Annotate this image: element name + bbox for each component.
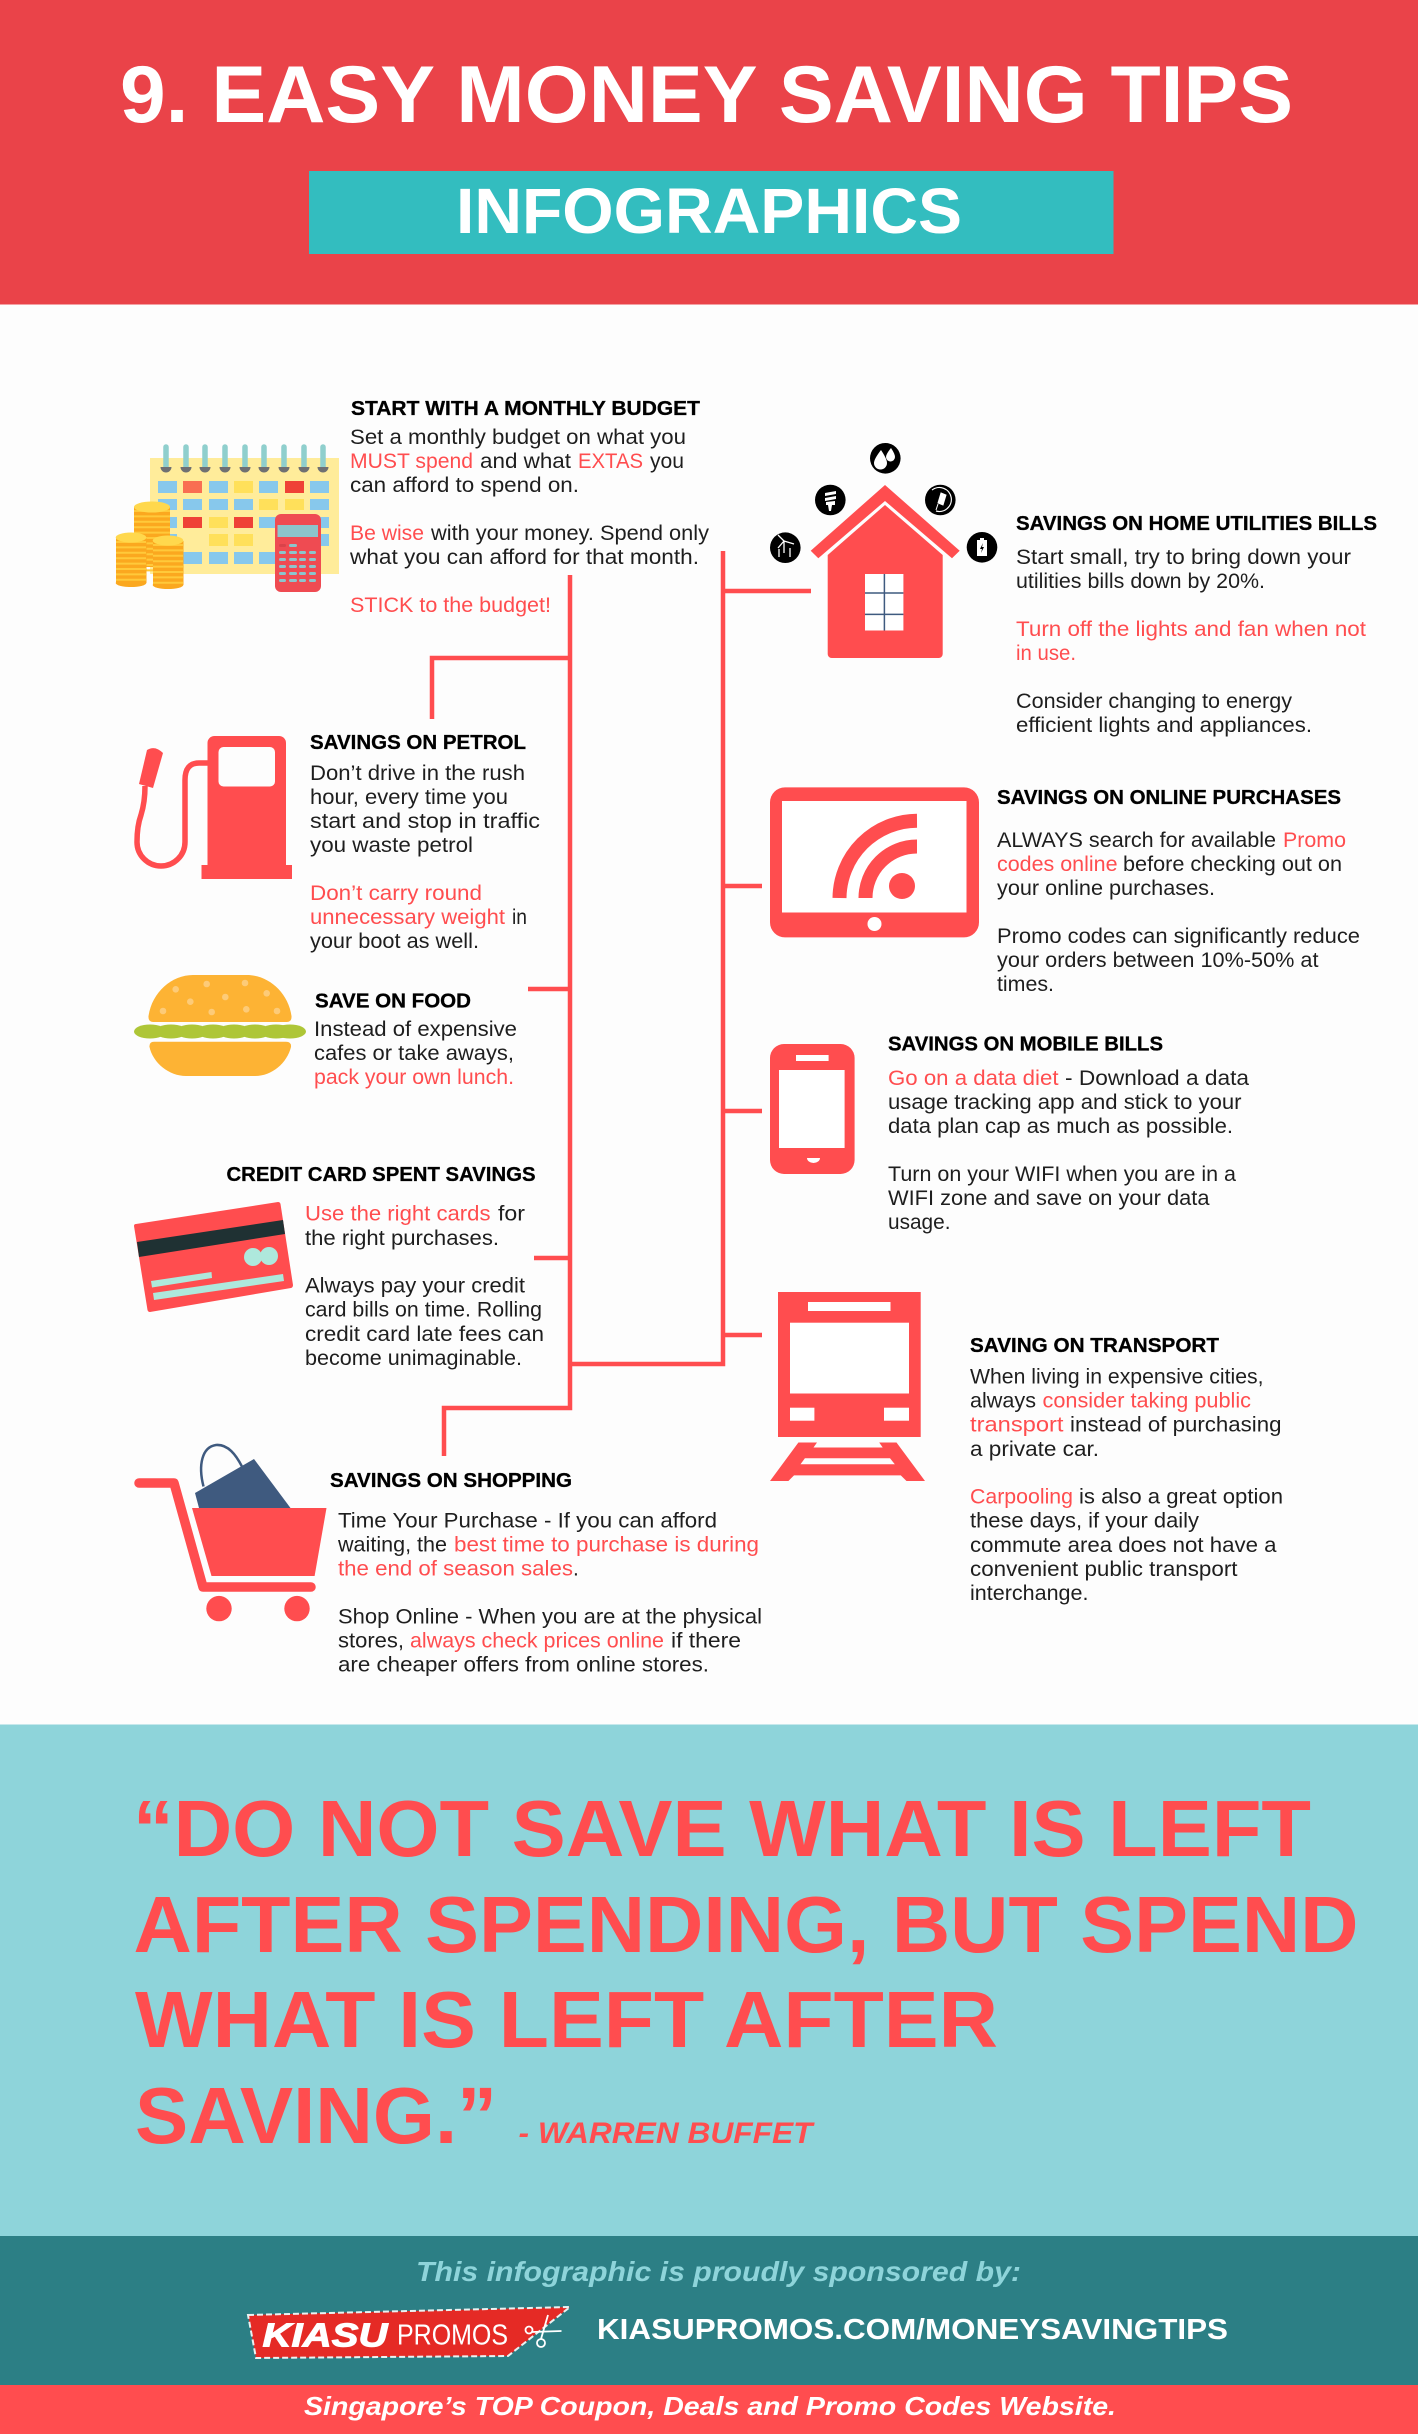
text: mobile bills body: Go on a data diet <box>888 1067 1059 1090</box>
text: home utilities body: efficient lights and appliances. <box>1016 714 1312 737</box>
tagline bar: Singapore’s TOP Coupon, Deals and Promo Codes Website. <box>304 2391 1116 2421</box>
text: petrol body: Don’t drive in the rush <box>310 762 525 785</box>
text: credit card body: for <box>498 1202 525 1226</box>
quote text: WHAT IS LEFT AFTER <box>135 1975 998 2064</box>
text: transport body: these days, if your daily <box>970 1510 1200 1532</box>
text: credit card body <box>305 1202 544 1370</box>
text: food body: cafes or take aways, <box>314 1042 514 1065</box>
text: transport body: When living in expensive cities, <box>970 1366 1264 1388</box>
text: petrol body: you waste petrol <box>310 834 473 857</box>
text: home utilities body: Turn off the lights and fan when not <box>1016 618 1366 641</box>
text: budget body: Be wise <box>350 522 424 545</box>
text: petrol body: hour, every time you <box>310 786 508 809</box>
title: 9. EASY MONEY SAVING TIPS <box>120 50 1293 140</box>
text: mobile bills body: usage. <box>888 1211 950 1234</box>
panel: mobile bills <box>770 1034 1249 1234</box>
icon: battery <box>967 532 997 563</box>
text: online purchases body: Promo codes can significantly reduce <box>997 925 1360 948</box>
text: food body: pack your own lunch. <box>314 1066 514 1089</box>
text: shopping body: if there <box>671 1630 741 1652</box>
text: credit card body: Always pay your credit <box>305 1274 525 1298</box>
quote text: “DO NOT SAVE WHAT IS LEFT <box>133 1784 1311 1873</box>
text: online purchases body: times. <box>997 973 1054 996</box>
quote text: AFTER SPENDING, BUT SPEND <box>134 1880 1358 1969</box>
text: petrol body <box>310 762 540 953</box>
text: transport body: is also a great option <box>1079 1486 1283 1508</box>
icon: light bulb <box>815 485 846 515</box>
text: budget body <box>349 426 710 617</box>
panel: food <box>134 975 517 1089</box>
text: budget body: MUST spend <box>350 450 473 473</box>
icon: left coin stack <box>116 532 146 587</box>
text: transport body: commute area does not have a <box>970 1534 1277 1557</box>
heading: food: SAVE ON FOOD <box>315 990 471 1012</box>
text: budget body: STICK to the budget! <box>350 594 551 617</box>
heading: transport: SAVING ON TRANSPORT <box>970 1335 1219 1357</box>
text: shopping body: the end of season sales . <box>338 1558 579 1580</box>
connector lines <box>432 551 811 1456</box>
quote text: SAVING.” <box>135 2071 497 2160</box>
text: online purchases body: before checking out on <box>1123 853 1342 876</box>
text: online purchases body: codes online <box>997 853 1118 876</box>
panel: online purchases <box>770 787 1360 996</box>
logo: Kiasu Promos: PROMOS <box>397 2320 508 2352</box>
text: online purchases body <box>997 829 1360 996</box>
panel: monthly budget <box>116 398 710 617</box>
text: petrol body: unnecessary weight <box>310 906 505 929</box>
text: shopping body: waiting, the <box>337 1534 447 1556</box>
heading: mobile bills: SAVINGS ON MOBILE BILLS <box>888 1034 1163 1056</box>
text: transport body <box>970 1366 1283 1605</box>
text: online purchases body: ALWAYS search for available <box>997 829 1276 852</box>
panel: shopping <box>139 1445 762 1676</box>
heading: petrol: SAVINGS ON PETROL <box>310 732 526 754</box>
text: transport body: transport <box>970 1414 1064 1436</box>
tagline bar <box>0 2385 1418 2434</box>
icon: house <box>811 485 960 658</box>
icon: scissors <box>526 2315 562 2347</box>
heading: home utilities: SAVINGS ON HOME UTILITIES BILLS <box>1016 513 1377 535</box>
text: shopping body: always check prices online <box>410 1630 664 1652</box>
text: petrol body: start and stop in traffic <box>310 810 540 833</box>
icon: petrol pump <box>137 736 292 879</box>
icon: right coin stack <box>153 536 184 589</box>
text: shopping body: best time to purchase is during <box>454 1534 759 1556</box>
text: budget body: with your money. Spend only <box>430 522 710 545</box>
panel: transport <box>770 1292 1283 1605</box>
icon: power plug <box>925 485 956 515</box>
text: mobile bills body: WIFI zone and save on your data <box>888 1187 1210 1210</box>
text: home utilities body: utilities bills down by 20%. <box>1016 570 1265 593</box>
text: home utilities body: Consider changing to energy <box>1016 690 1293 713</box>
icon: train <box>770 1292 925 1481</box>
text: online purchases body: your orders between 10%-50% at <box>997 949 1319 972</box>
text: mobile bills body: data plan cap as much as possible. <box>888 1115 1233 1138</box>
icon: mobile phone <box>770 1044 855 1174</box>
text: transport body: Carpooling <box>970 1486 1073 1508</box>
text: food body <box>314 1018 517 1089</box>
text: transport body: instead of purchasing <box>1070 1414 1282 1436</box>
text: mobile bills body: Turn on your WIFI when you are in a <box>888 1163 1236 1186</box>
panel: sponsor footer <box>0 2236 1418 2385</box>
text: transport body: interchange. <box>970 1582 1088 1605</box>
text: home utilities body <box>1016 546 1366 737</box>
text: credit card body: Use the right cards <box>305 1202 490 1226</box>
header banner <box>0 0 1418 304</box>
text: food body: Instead of expensive <box>314 1018 517 1041</box>
text: mobile bills body: - Download a data <box>1065 1067 1249 1090</box>
text: budget body: what you can afford for that month. <box>349 546 699 569</box>
icon: burger <box>134 975 306 1076</box>
text: home utilities body: Start small, try to bring down your <box>1016 546 1351 569</box>
icon: shopping cart with bag <box>139 1445 326 1621</box>
text: budget body: can afford to spend on. <box>350 474 579 497</box>
heading: shopping: SAVINGS ON SHOPPING <box>330 1470 572 1492</box>
text: credit card body: become unimaginable. <box>305 1347 522 1370</box>
text: mobile bills body <box>888 1067 1249 1234</box>
panel: quote <box>0 1724 1418 2236</box>
text: transport body: a private car. <box>970 1438 1099 1461</box>
panel: petrol <box>137 732 540 953</box>
text: transport body: consider taking public <box>1042 1390 1251 1412</box>
text: credit card body: card bills on time. Rolling <box>305 1298 542 1322</box>
panel: home utilities <box>770 443 1377 737</box>
text: budget body: you <box>650 450 684 473</box>
subtitle band <box>309 171 1114 254</box>
subtitle band: INFOGRAPHICS <box>456 175 962 247</box>
icon: credit card <box>134 1202 293 1312</box>
panel: credit card <box>134 1164 544 1370</box>
text: petrol body: your boot as well. <box>310 930 479 953</box>
sponsor URL: KIASUPROMOS.COM/MONEYSAVINGTIPS <box>597 2314 1228 2346</box>
quote attribution: - WARREN BUFFET <box>518 2117 815 2150</box>
icon: water drops <box>870 443 901 474</box>
text: petrol body: in <box>512 906 527 929</box>
text: home utilities body: in use. <box>1016 642 1076 665</box>
text: shopping body: Time Your Purchase - If you can afford <box>338 1510 717 1532</box>
logo: Kiasu Promos <box>248 2307 570 2358</box>
logo: Kiasu Promos: KIASU <box>262 2316 389 2354</box>
heading: credit card: CREDIT CARD SPENT SAVINGS <box>226 1164 536 1186</box>
icon: tablet with wifi <box>770 787 979 937</box>
text: mobile bills body: usage tracking app and stick to your <box>888 1091 1242 1114</box>
text: petrol body: Don’t carry round <box>310 882 482 905</box>
text: budget body: Set a monthly budget on what you <box>350 426 686 449</box>
text: online purchases body: Promo <box>1283 829 1346 852</box>
heading: online purchases: SAVINGS ON ONLINE PURCHASES <box>997 787 1341 809</box>
text: credit card body: the right purchases. <box>305 1227 499 1250</box>
text: shopping body <box>337 1510 762 1676</box>
icon: back coin stack <box>134 502 170 572</box>
sponsor line: This infographic is proudly sponsored by: <box>416 2256 1021 2287</box>
text: budget body: and what <box>480 450 571 473</box>
text: shopping body: Shop Online - When you are at the physical <box>338 1606 762 1628</box>
quote text <box>133 1784 1358 2160</box>
icon: calculator <box>275 514 321 592</box>
icon: wind turbines <box>770 532 801 563</box>
icon: calendar with coins and calculator <box>116 447 339 592</box>
text: transport body: always <box>970 1390 1036 1412</box>
text: online purchases body: your online purchases. <box>997 877 1215 900</box>
text: shopping body: stores, <box>338 1630 404 1652</box>
text: transport body: convenient public transport <box>970 1558 1238 1581</box>
heading: budget: START WITH A MONTHLY BUDGET <box>351 398 700 420</box>
text: shopping body: are cheaper offers from online stores. <box>338 1654 709 1676</box>
text: budget body: EXTAS <box>578 450 643 473</box>
text: credit card body: credit card late fees can <box>305 1323 544 1346</box>
